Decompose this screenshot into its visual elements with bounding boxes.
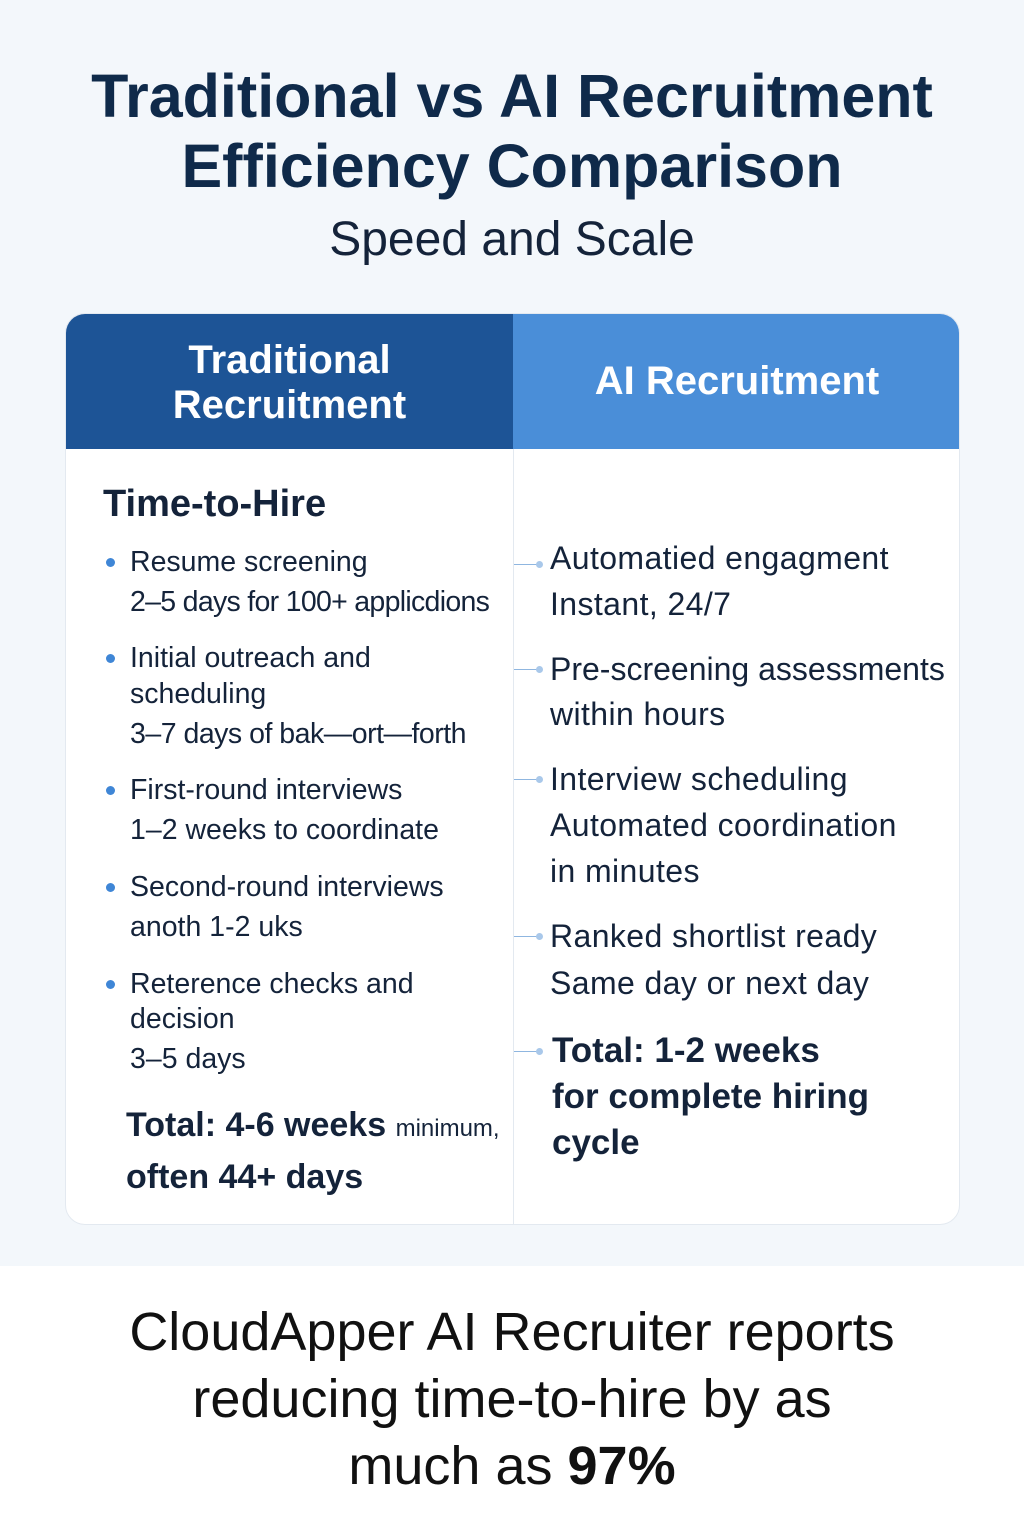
panel: traditional list: First-round interviews xyxy=(130,774,402,806)
panel: traditional list: scheduling xyxy=(130,678,266,710)
panel: traditional list: decision xyxy=(130,1003,235,1035)
panel: AI list: Instant, 24/7 xyxy=(550,586,731,622)
panel: AI list: within hours xyxy=(550,696,726,732)
panel: traditional list xyxy=(103,483,500,1196)
panel: traditional list: Reterence checks and xyxy=(130,968,414,1000)
bottom callout: much as 97% xyxy=(348,1436,676,1496)
panel: traditional list: 1–2 weeks to coordinate xyxy=(130,814,439,846)
bottom callout xyxy=(129,1302,895,1496)
header: traditional: Recruitment xyxy=(173,383,406,427)
panel: traditional list: 2–5 days for 100+ applicdions xyxy=(130,586,489,618)
panel: traditional list: Resume screening xyxy=(130,546,368,578)
panel: traditional list: anoth 1-2 uks xyxy=(130,911,303,943)
bottom callout: CloudApper AI Recruiter reports xyxy=(129,1302,895,1362)
panel: AI list: Ranked shortlist ready xyxy=(550,918,877,954)
panel: AI list: Same day or next day xyxy=(550,965,869,1001)
title: Traditional vs AI Recruitment xyxy=(91,62,933,130)
panel: AI list: Automated coordination xyxy=(550,807,897,843)
panel: AI list: Pre-screening assessments xyxy=(550,651,945,687)
heading: time-to-hire: Time-to-Hire xyxy=(103,483,326,525)
header: traditional: Traditional xyxy=(188,338,391,382)
panel: traditional list: Initial outreach and xyxy=(130,642,371,674)
total: AI: Total: 1-2 weeks xyxy=(552,1031,820,1070)
total: AI xyxy=(552,1031,869,1162)
total: traditional: Total: 4-6 weeks minimum, xyxy=(126,1106,500,1144)
total: traditional: often 44+ days xyxy=(126,1158,363,1196)
panel: AI list xyxy=(514,540,945,1162)
title xyxy=(91,62,933,200)
total: AI: cycle xyxy=(552,1123,640,1162)
total: AI: for complete hiring xyxy=(552,1077,869,1116)
title: Efficiency Comparison xyxy=(182,132,842,200)
panel: traditional list: 3–7 days of bak—ort—forth xyxy=(130,718,466,750)
panel: AI list: Automatied engagment xyxy=(550,540,889,576)
subtitle: Speed and Scale xyxy=(329,213,695,266)
panel: AI list: Interview scheduling xyxy=(550,761,848,797)
header: traditional xyxy=(66,314,513,449)
panel: traditional list: 3–5 days xyxy=(130,1043,246,1075)
panel: traditional list: Second-round interviews xyxy=(130,871,444,903)
bottom callout: reducing time-to-hire by as xyxy=(192,1369,832,1429)
header: AI: AI Recruitment xyxy=(595,359,879,403)
panel: AI list: in minutes xyxy=(550,853,700,889)
total: traditional xyxy=(126,1106,500,1196)
comparison table xyxy=(65,313,960,1225)
header: AI xyxy=(513,314,961,449)
